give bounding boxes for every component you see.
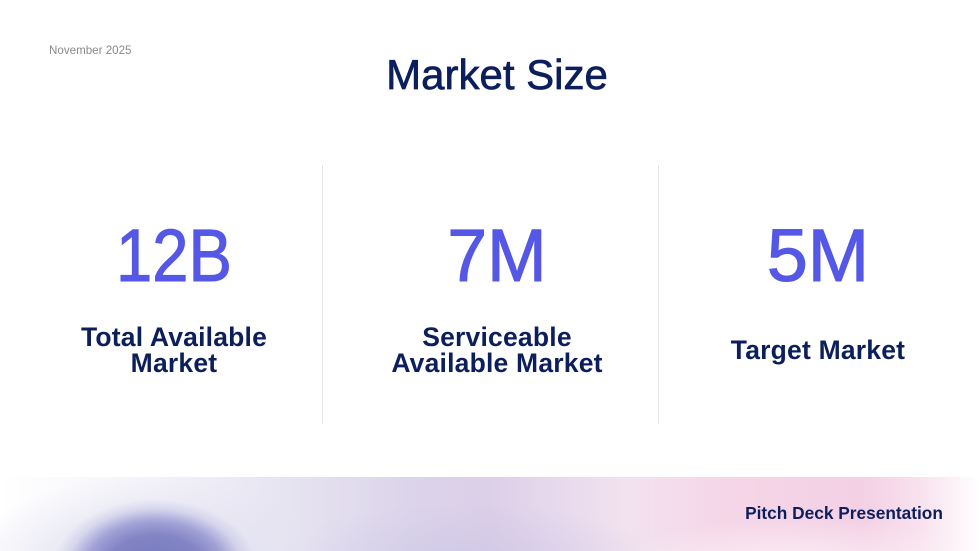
label: Total Available bbox=[81, 322, 267, 352]
value 7M: 7M bbox=[447, 214, 547, 297]
footer gradient band bbox=[0, 477, 980, 551]
title: Market Size bbox=[386, 51, 608, 98]
label bbox=[391, 322, 603, 378]
value 5M: 5M bbox=[767, 214, 869, 297]
label: Target Market bbox=[731, 335, 905, 365]
footer label: Pitch Deck Presentation bbox=[745, 503, 943, 523]
value 12B: 12B bbox=[116, 214, 232, 297]
divider right bbox=[658, 165, 659, 424]
label: Market bbox=[131, 348, 217, 378]
label: Serviceable bbox=[422, 322, 572, 352]
label bbox=[81, 322, 267, 378]
date label: November 2025 bbox=[49, 44, 132, 57]
stat: total available market bbox=[81, 214, 267, 378]
stat: target market bbox=[731, 214, 905, 365]
divider left bbox=[322, 165, 323, 424]
stat: serviceable available market bbox=[391, 214, 603, 378]
label: Available Market bbox=[391, 348, 603, 378]
